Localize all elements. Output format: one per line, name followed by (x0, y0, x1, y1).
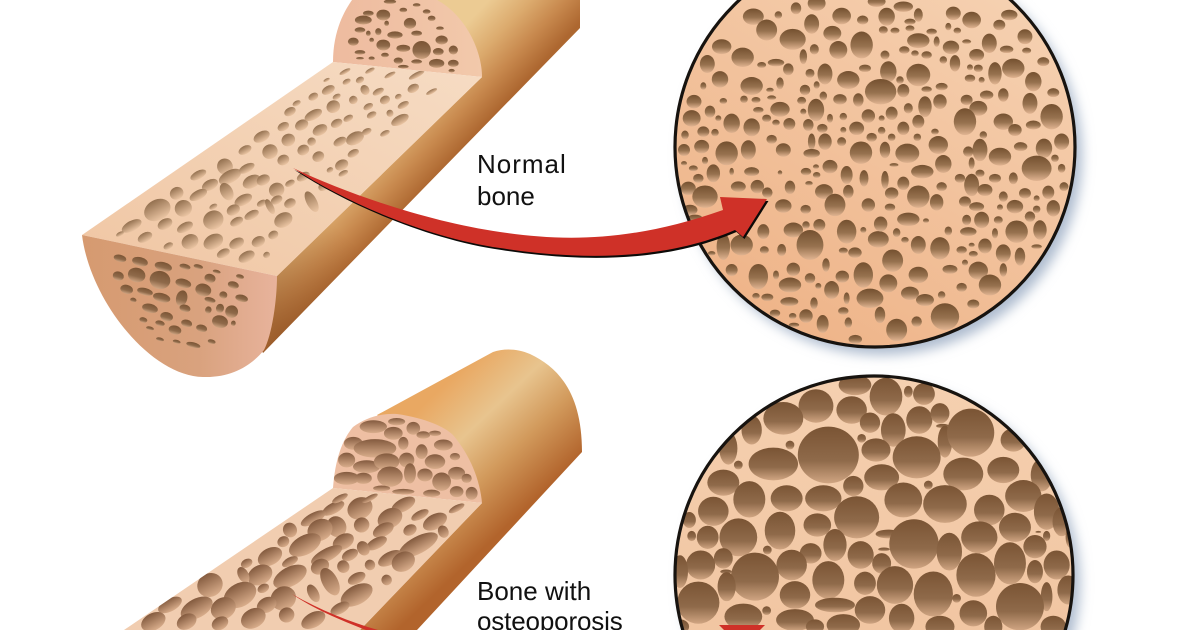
osteoporosis: magnified pores (671, 375, 1079, 630)
normal bone: far end pores (348, 0, 459, 72)
magnified disc: bone with osteoporosis (671, 375, 1080, 630)
osteoporosis: far end pores (334, 418, 478, 500)
normal bone: cut surface pores (115, 66, 438, 265)
label: normal bone: Normal (477, 149, 567, 179)
normal bone: front end pores (112, 253, 249, 349)
osteoporosis: cut surface pores (138, 491, 466, 630)
arrow: osteoporotic bone to magnified disc (292, 594, 765, 630)
label: normal bone: bone (477, 181, 535, 211)
normal bone: magnified pores (678, 0, 1069, 344)
normal bone (82, 0, 580, 377)
label: bone with osteoporosis: Bone with (477, 576, 591, 606)
arrow: normal bone to magnified disc (293, 168, 768, 258)
magnified disc: normal bone (675, 0, 1082, 355)
bone with osteoporosis (124, 350, 582, 630)
